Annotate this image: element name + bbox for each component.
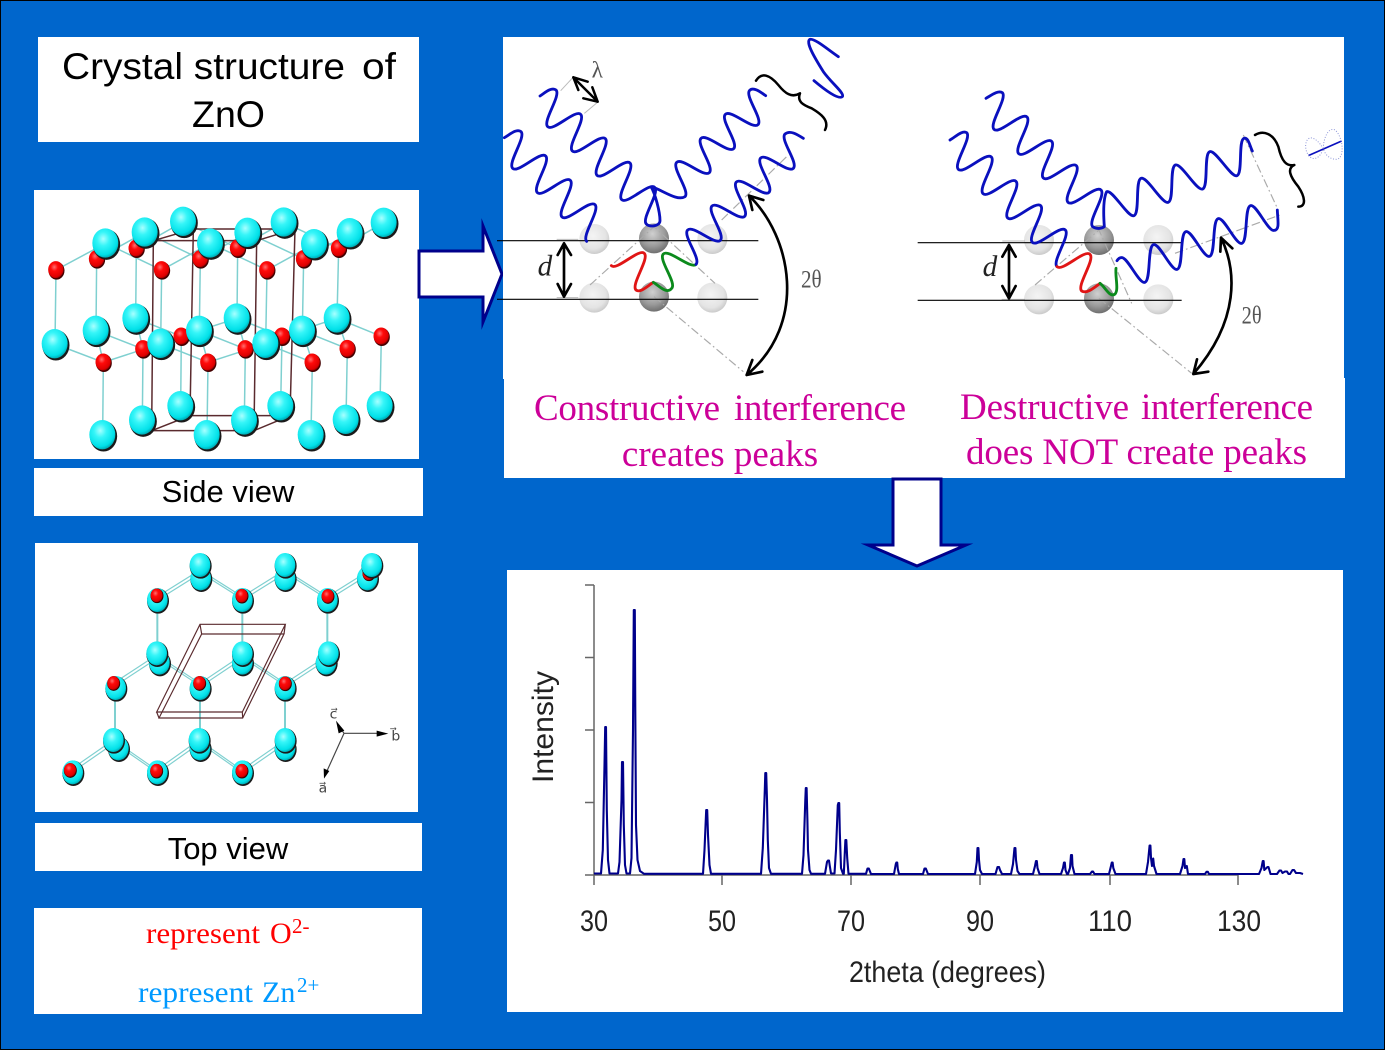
x axis tick labels: 130 xyxy=(1217,905,1261,938)
wave: lower incident xyxy=(504,131,596,241)
brace xyxy=(756,75,826,130)
label: side view xyxy=(34,468,423,516)
lattice planes: constructive xyxy=(497,241,758,299)
spacing label: d xyxy=(538,250,553,282)
angle label: 2θ xyxy=(801,266,822,294)
legend: O xyxy=(270,917,292,950)
unit cell frame: side view xyxy=(152,229,295,431)
arrow: structure to diffraction xyxy=(419,226,502,322)
x axis tick labels xyxy=(580,905,1261,938)
spacing arrow xyxy=(558,243,571,297)
path difference: red segment xyxy=(1057,254,1100,292)
angle arc xyxy=(747,196,787,375)
x axis tick labels: 30 xyxy=(580,905,608,938)
x axis tick labels: 50 xyxy=(708,905,736,938)
axes: a b c xyxy=(319,708,400,796)
wave: lower reflected xyxy=(1117,206,1278,282)
caption: destructive: Destructive xyxy=(960,387,1129,428)
wavelength label: λ xyxy=(592,57,604,83)
bonds: top view xyxy=(70,570,371,773)
label: top view xyxy=(35,823,422,871)
axes: a b c: b⃗ xyxy=(390,727,400,745)
panel: diffraction diagrams xyxy=(497,37,1345,478)
caption: destructive: interference xyxy=(1141,387,1313,428)
title xyxy=(38,37,419,142)
legend: represent xyxy=(146,917,261,950)
diagram: constructive interference xyxy=(497,39,843,375)
unit cell frame: top view xyxy=(157,624,285,718)
path difference: red segment xyxy=(611,253,653,291)
wave: upper incident and reflected xyxy=(540,89,766,226)
caption: constructive: creates peaks xyxy=(622,434,818,475)
brace xyxy=(1255,133,1304,207)
angle label: 2θ xyxy=(1242,302,1262,330)
bonds: side view xyxy=(55,222,384,435)
scattered wave: cancelled xyxy=(1306,129,1342,159)
y axis title: Intensity xyxy=(527,671,560,783)
panel: XRD chart xyxy=(507,570,1343,1012)
scattered wave fragment xyxy=(809,39,843,97)
caption: constructive xyxy=(534,388,906,475)
legend: 2- xyxy=(292,914,310,938)
diagram: destructive interference xyxy=(918,92,1342,374)
wave: lower reflected xyxy=(687,132,803,264)
guide lines: constructive xyxy=(590,155,788,372)
panel: top view crystal structure xyxy=(35,543,418,812)
x axis tick labels: 110 xyxy=(1088,905,1132,938)
caption: destructive xyxy=(960,387,1313,473)
legend: 2+ xyxy=(297,973,319,997)
guide lines: destructive xyxy=(1035,135,1280,373)
path difference: green segment xyxy=(1100,268,1117,295)
axes: a b c: a⃗ xyxy=(319,781,327,796)
path difference: green segment xyxy=(653,253,696,291)
legend: Zn xyxy=(262,976,295,1009)
caption: destructive: does NOT create peaks xyxy=(966,432,1307,473)
title: ZnO xyxy=(192,93,265,135)
atoms: destructive xyxy=(1024,225,1173,314)
legend: represent xyxy=(138,976,254,1009)
x axis tick labels: 70 xyxy=(837,905,865,938)
label: side view: Side view xyxy=(162,474,295,509)
wavelength arrow xyxy=(573,77,598,102)
atoms: side view xyxy=(42,207,398,451)
lattice planes: destructive xyxy=(918,243,1182,300)
arrow: diffraction to pattern xyxy=(868,479,966,566)
label: top view: Top view xyxy=(168,831,289,866)
axes: a b c: c⃗ xyxy=(330,708,338,723)
XRD trace xyxy=(594,610,1303,874)
title: of xyxy=(362,45,397,87)
wave: lower incident xyxy=(950,132,1066,267)
title: Crystal structure xyxy=(62,45,345,87)
x axis tick labels: 90 xyxy=(966,905,994,938)
atoms: constructive xyxy=(579,223,727,313)
panel: side view crystal structure xyxy=(34,190,419,459)
caption: constructive: interference xyxy=(734,388,906,429)
atoms: top view xyxy=(62,553,383,786)
caption: constructive: Constructive xyxy=(534,388,720,429)
x axis title: 2theta (degrees) xyxy=(849,956,1046,989)
angle arc xyxy=(1193,238,1232,374)
legend xyxy=(34,908,422,1014)
wave: upper incident and reflected xyxy=(986,92,1252,228)
spacing arrow xyxy=(1002,245,1016,298)
spacing label: d xyxy=(983,251,998,283)
chart axes xyxy=(585,585,1238,885)
